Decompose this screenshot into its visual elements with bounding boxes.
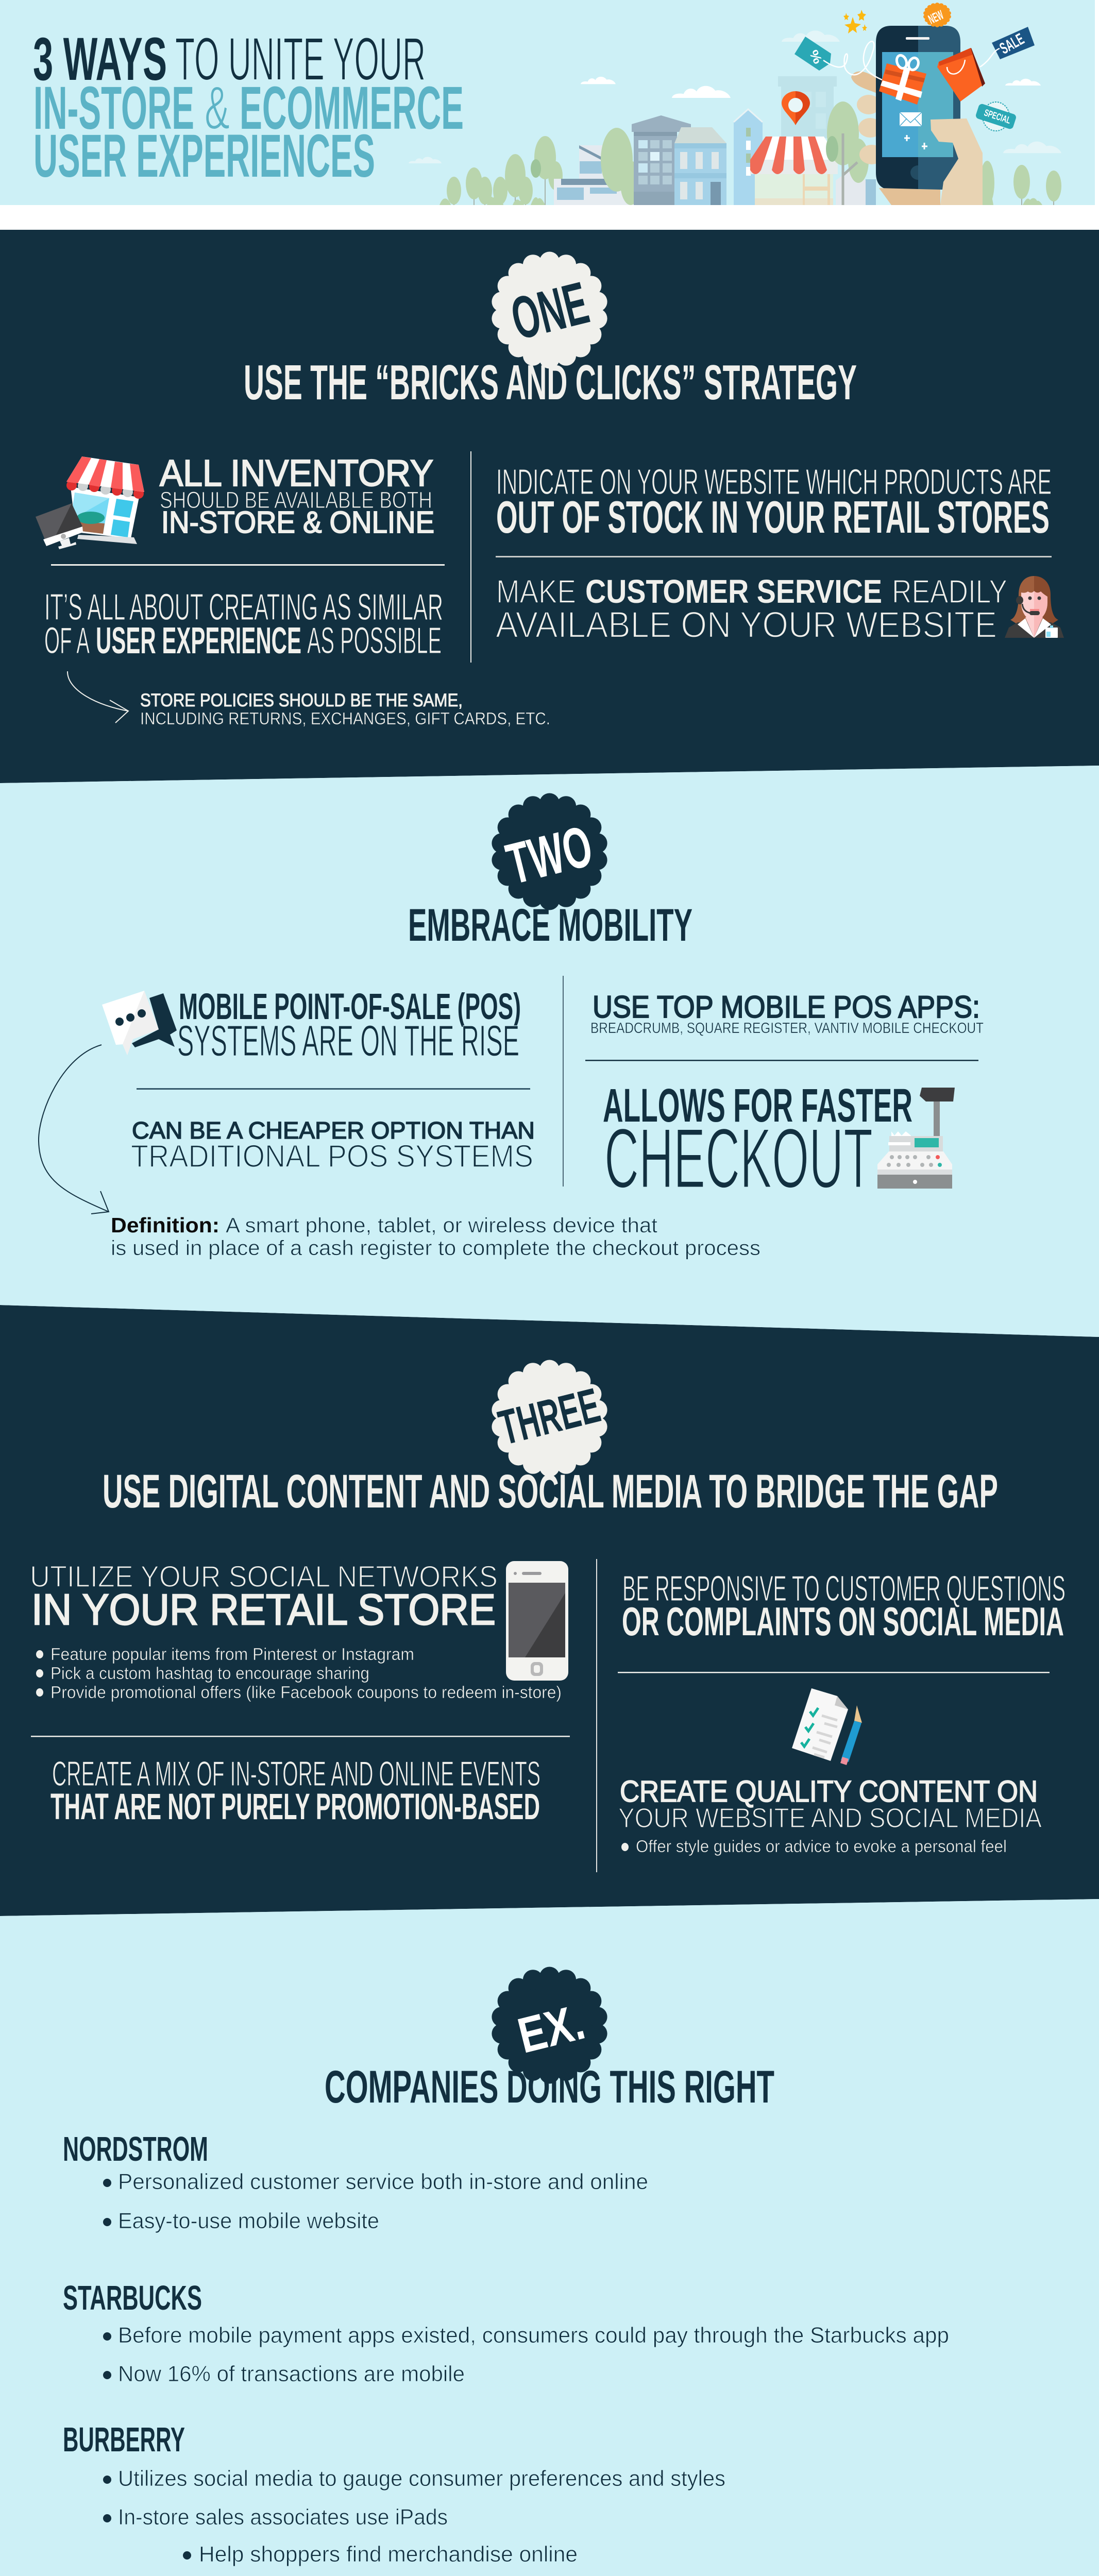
arrow: to definition [39,1045,109,1214]
pale background building [778,76,837,138]
text: cheaper option [131,1117,535,1174]
text: customer service: MAKE [496,573,576,610]
text: events: CREATE A MIX OF IN-STORE AND ONLINE EVENTS [52,1754,540,1793]
icon: hand fingers [851,72,884,164]
badge: three: THREE [494,1378,605,1455]
panel: section two background [0,766,1099,1337]
section one: strategy [36,251,1064,728]
text: all inventory: SHOULD BE AVAILABLE BOTH [160,487,432,513]
icon: sale tag [980,27,1035,67]
text: quality content [618,1775,1042,1856]
title: IN-STORE [33,74,194,142]
icon: location pin [782,91,810,125]
list: social network tips [36,1645,562,1702]
badge: three [492,1360,607,1477]
title: & [205,74,230,142]
badge: one: ONE [504,269,595,352]
text: events [50,1754,540,1827]
trees behind [439,133,1061,205]
text: top pos apps [590,990,984,1037]
icon: stars [843,10,867,33]
text: store policies: INCLUDING RETURNS, EXCHANGES, GIFT CARDS, ETC. [140,709,550,728]
heading: companies: COMPANIES DOING THIS RIGHT [325,2061,774,2112]
text: similar user experience: USER EXPERIENCE [96,620,301,662]
text: definition [111,1213,760,1260]
text: customer service: AVAILABLE ON YOUR WEBSITE [496,605,997,646]
text: social networks: IN YOUR RETAIL STORE [31,1585,496,1634]
example: nordstrom: Personalized customer service both in-store and online [118,2170,648,2194]
text: similar user experience: IT’S ALL ABOUT CREATING AS SIMILAR [44,587,443,628]
icon: percent tag [794,37,882,80]
text: similar user experience: OF A [44,620,90,662]
icon: smartphone [876,26,960,190]
list: social network tips: Pick a custom hashtag to encourage sharing [50,1664,369,1683]
badge: ex: EX. [513,1993,590,2064]
title: 3 WAYS [33,25,167,93]
text: cheaper option: CAN BE A CHEAPER OPTION THAN [132,1117,535,1144]
text: customer service [496,573,1007,646]
icon: percent tag: % [806,47,825,66]
example: nordstrom: NORDSTROM [63,2130,208,2168]
icon: phone [506,1561,568,1681]
icon: clouds [409,30,1061,163]
title [33,25,464,190]
example: burberry [63,2420,725,2576]
example: burberry: BURBERRY [63,2420,185,2459]
buildings [554,109,763,205]
text: quality content: CREATE QUALITY CONTENT ON [620,1775,1038,1808]
icon: cash register [877,1088,955,1189]
badge: ex [492,1967,607,2083]
icon: special badge: SPECIAL [983,108,1012,126]
example: nordstrom [63,2130,648,2233]
badge: two: TWO [500,814,599,896]
heading: embrace mobility: EMBRACE MOBILITY [408,899,692,951]
icon: new badge: NEW [926,8,946,27]
section two: mobility [39,793,984,1260]
icon: new badge [923,3,951,27]
example: starbucks: STARBUCKS [63,2279,202,2317]
text: all inventory: IN-STORE & ONLINE [161,505,434,539]
example: starbucks [63,2279,949,2386]
panel: examples background [0,1899,1099,2576]
front trees and white house [826,101,876,205]
example: burberry: Utilizes social media to gauge consumer preferences and styles [118,2466,725,2491]
example: burberry: Help shoppers find merchandise online [199,2542,578,2567]
panel: hero banner [0,0,1095,205]
text: customer service: READILY [892,573,1007,610]
text: social networks: UTILIZE YOUR SOCIAL NETWORKS [30,1560,498,1594]
icon: store with monitor [36,456,144,549]
text: mobile pos [177,987,521,1065]
text: store policies [140,690,550,728]
panel: section one background [0,230,1099,783]
example: starbucks: Before mobile payment apps existed, consumers could pay through the Starbucks app [118,2323,949,2348]
example: starbucks: Now 16% of transactions are mobile [118,2362,465,2386]
text: definition: is used in place of a cash register to complete the checkout process [111,1236,760,1260]
list: social network tips: Feature popular items from Pinterest or Instagram [50,1645,414,1664]
example: nordstrom: Easy-to-use mobile website [118,2209,379,2233]
text: faster checkout [603,1079,912,1206]
icon: hand thumb and palm [879,118,983,205]
storefront with striped awning [750,137,838,205]
badge: two [492,793,607,910]
text: all inventory [160,453,434,539]
icon: support agent [1005,576,1064,638]
title: USER EXPERIENCES [33,122,375,190]
text: faster checkout: CHECKOUT [604,1111,873,1206]
text: social networks [30,1560,498,1634]
text: mobile pos: MOBILE POINT-OF-SALE (POS) [179,987,521,1027]
icon: chat bubbles [102,991,177,1055]
list: social network tips: Provide promotional offers (like Facebook coupons to redeem in-store) [50,1683,562,1702]
section: company examples [63,1967,949,2576]
title: TO UNITE YOUR [175,25,426,93]
icon: sale tag: SALE [997,30,1027,58]
panel: section three background [0,1305,1099,1916]
example: burberry: In-store sales associates use iPads [118,2505,448,2530]
text: cheaper option: TRADITIONAL POS SYSTEMS [131,1139,533,1174]
text: quality content: YOUR WEBSITE AND SOCIAL MEDIA [618,1803,1042,1834]
badge: one [492,251,607,369]
arrow: to store policies [67,671,128,723]
text: similar user experience: AS POSSIBLE [307,620,442,662]
text: mobile pos: SYSTEMS ARE ON THE RISE [177,1016,519,1065]
icon: checklist and pencil [792,1688,862,1765]
text: out of stock [496,462,1052,543]
text: top pos apps: BREADCRUMB, SQUARE REGISTER, VANTIV MOBILE CHECKOUT [590,1020,984,1037]
text: top pos apps: USE TOP MOBILE POS APPS: [593,990,980,1024]
text: quality content: Offer style guides or advice to evoke a personal feel [636,1837,1007,1856]
text: customer service: CUSTOMER SERVICE [585,573,882,610]
title: ECOMMERCE [240,74,464,142]
illustration: city and phone [409,3,1061,205]
text: definition: Definition: [111,1213,219,1237]
section three: digital content [30,1360,1066,1872]
text: store policies: STORE POLICIES SHOULD BE THE SAME, [140,690,463,710]
icon: special badge [975,102,1017,131]
text: definition: A smart phone, tablet, or wireless device that [226,1213,658,1237]
text: all inventory: ALL INVENTORY [160,453,433,494]
icon: gift box [879,54,926,105]
text: responsive [622,1568,1066,1644]
text: similar user experience [44,587,443,662]
text: events: THAT ARE NOT PURELY PROMOTION-BASED [50,1787,540,1827]
icon: shopping bag [937,48,985,101]
